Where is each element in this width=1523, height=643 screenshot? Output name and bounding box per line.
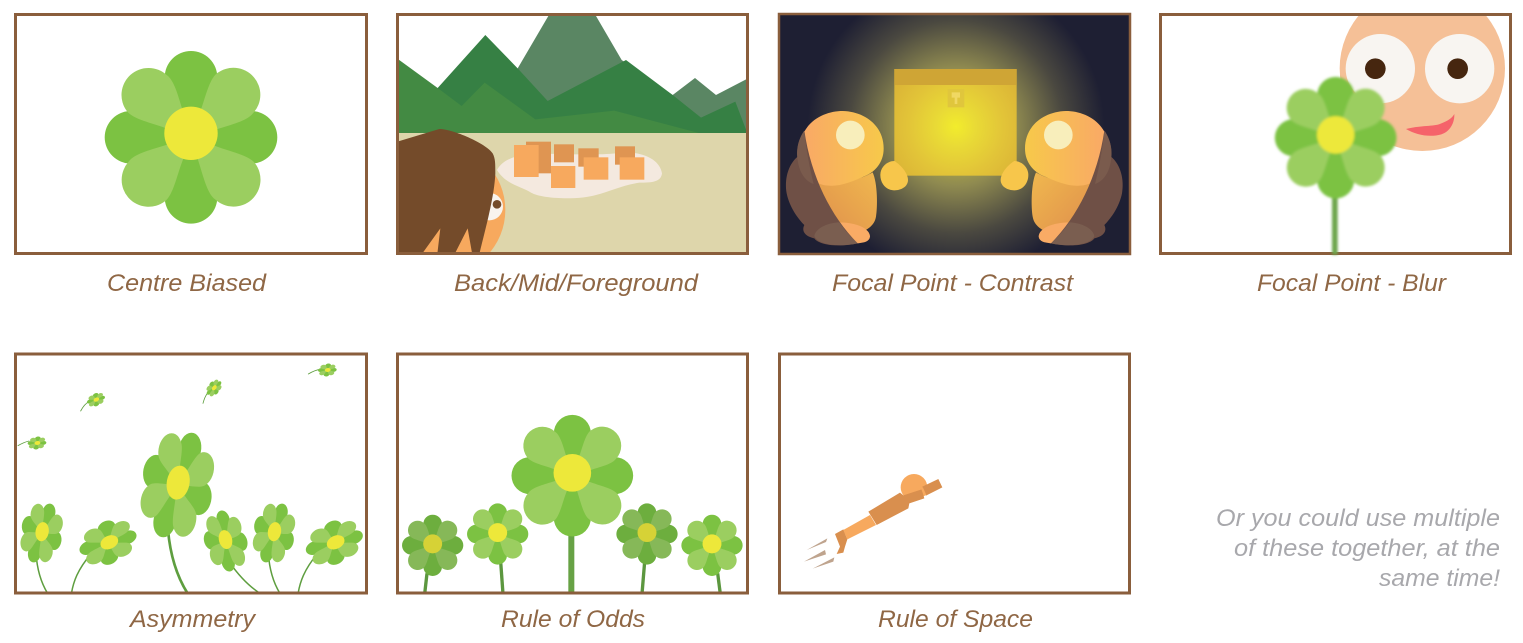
midground mountains bbox=[438, 35, 746, 133]
label: focal point contrast: Focal Point - Contrast bbox=[832, 270, 1074, 297]
treasure box bbox=[894, 69, 1017, 176]
large swaying flower bbox=[140, 432, 214, 538]
panel: centre biased bbox=[16, 14, 366, 254]
note: use multiple together: same time! bbox=[1379, 565, 1500, 592]
near hills bbox=[396, 58, 703, 134]
sand ground bbox=[396, 133, 749, 256]
flanking flowers bbox=[402, 503, 743, 576]
foreground character bbox=[399, 129, 506, 252]
panel: focal point contrast bbox=[778, 12, 1132, 256]
icon: centred flower bbox=[105, 51, 277, 224]
label: back mid foreground: Back/Mid/Foreground bbox=[454, 270, 699, 297]
blurred flower bbox=[1275, 77, 1397, 255]
main flower bbox=[511, 415, 633, 537]
label: focal point blur: Focal Point - Blur bbox=[1257, 270, 1447, 297]
panel: rule of odds bbox=[398, 354, 748, 594]
label: centre biased: Centre Biased bbox=[107, 270, 267, 297]
note: use multiple together: Or you could use multiple bbox=[1216, 505, 1500, 532]
flower stems bbox=[18, 369, 320, 594]
distant flowers bbox=[26, 363, 338, 450]
stems bbox=[425, 533, 720, 594]
background mountains bbox=[518, 16, 746, 130]
left character bbox=[786, 111, 908, 245]
swaying flowers bbox=[12, 493, 365, 573]
panel: focal point blur bbox=[1160, 0, 1510, 255]
panel: rule of space bbox=[780, 354, 1130, 593]
icon: flying character bbox=[804, 474, 942, 569]
character face bbox=[1340, 16, 1505, 151]
label: asymmetry: Asymmetry bbox=[128, 606, 257, 633]
label: rule of space: Rule of Space bbox=[878, 606, 1033, 633]
panel: asymmetry bbox=[12, 354, 366, 594]
note: use multiple together bbox=[1216, 505, 1500, 592]
light glow bbox=[816, 15, 1096, 253]
label: rule of odds: Rule of Odds bbox=[501, 606, 645, 633]
right character bbox=[1001, 111, 1123, 245]
note: use multiple together: of these together, at the bbox=[1234, 535, 1500, 562]
panel: back mid foreground bbox=[396, 13, 749, 255]
town patch bbox=[497, 152, 662, 198]
town buildings bbox=[514, 142, 644, 188]
